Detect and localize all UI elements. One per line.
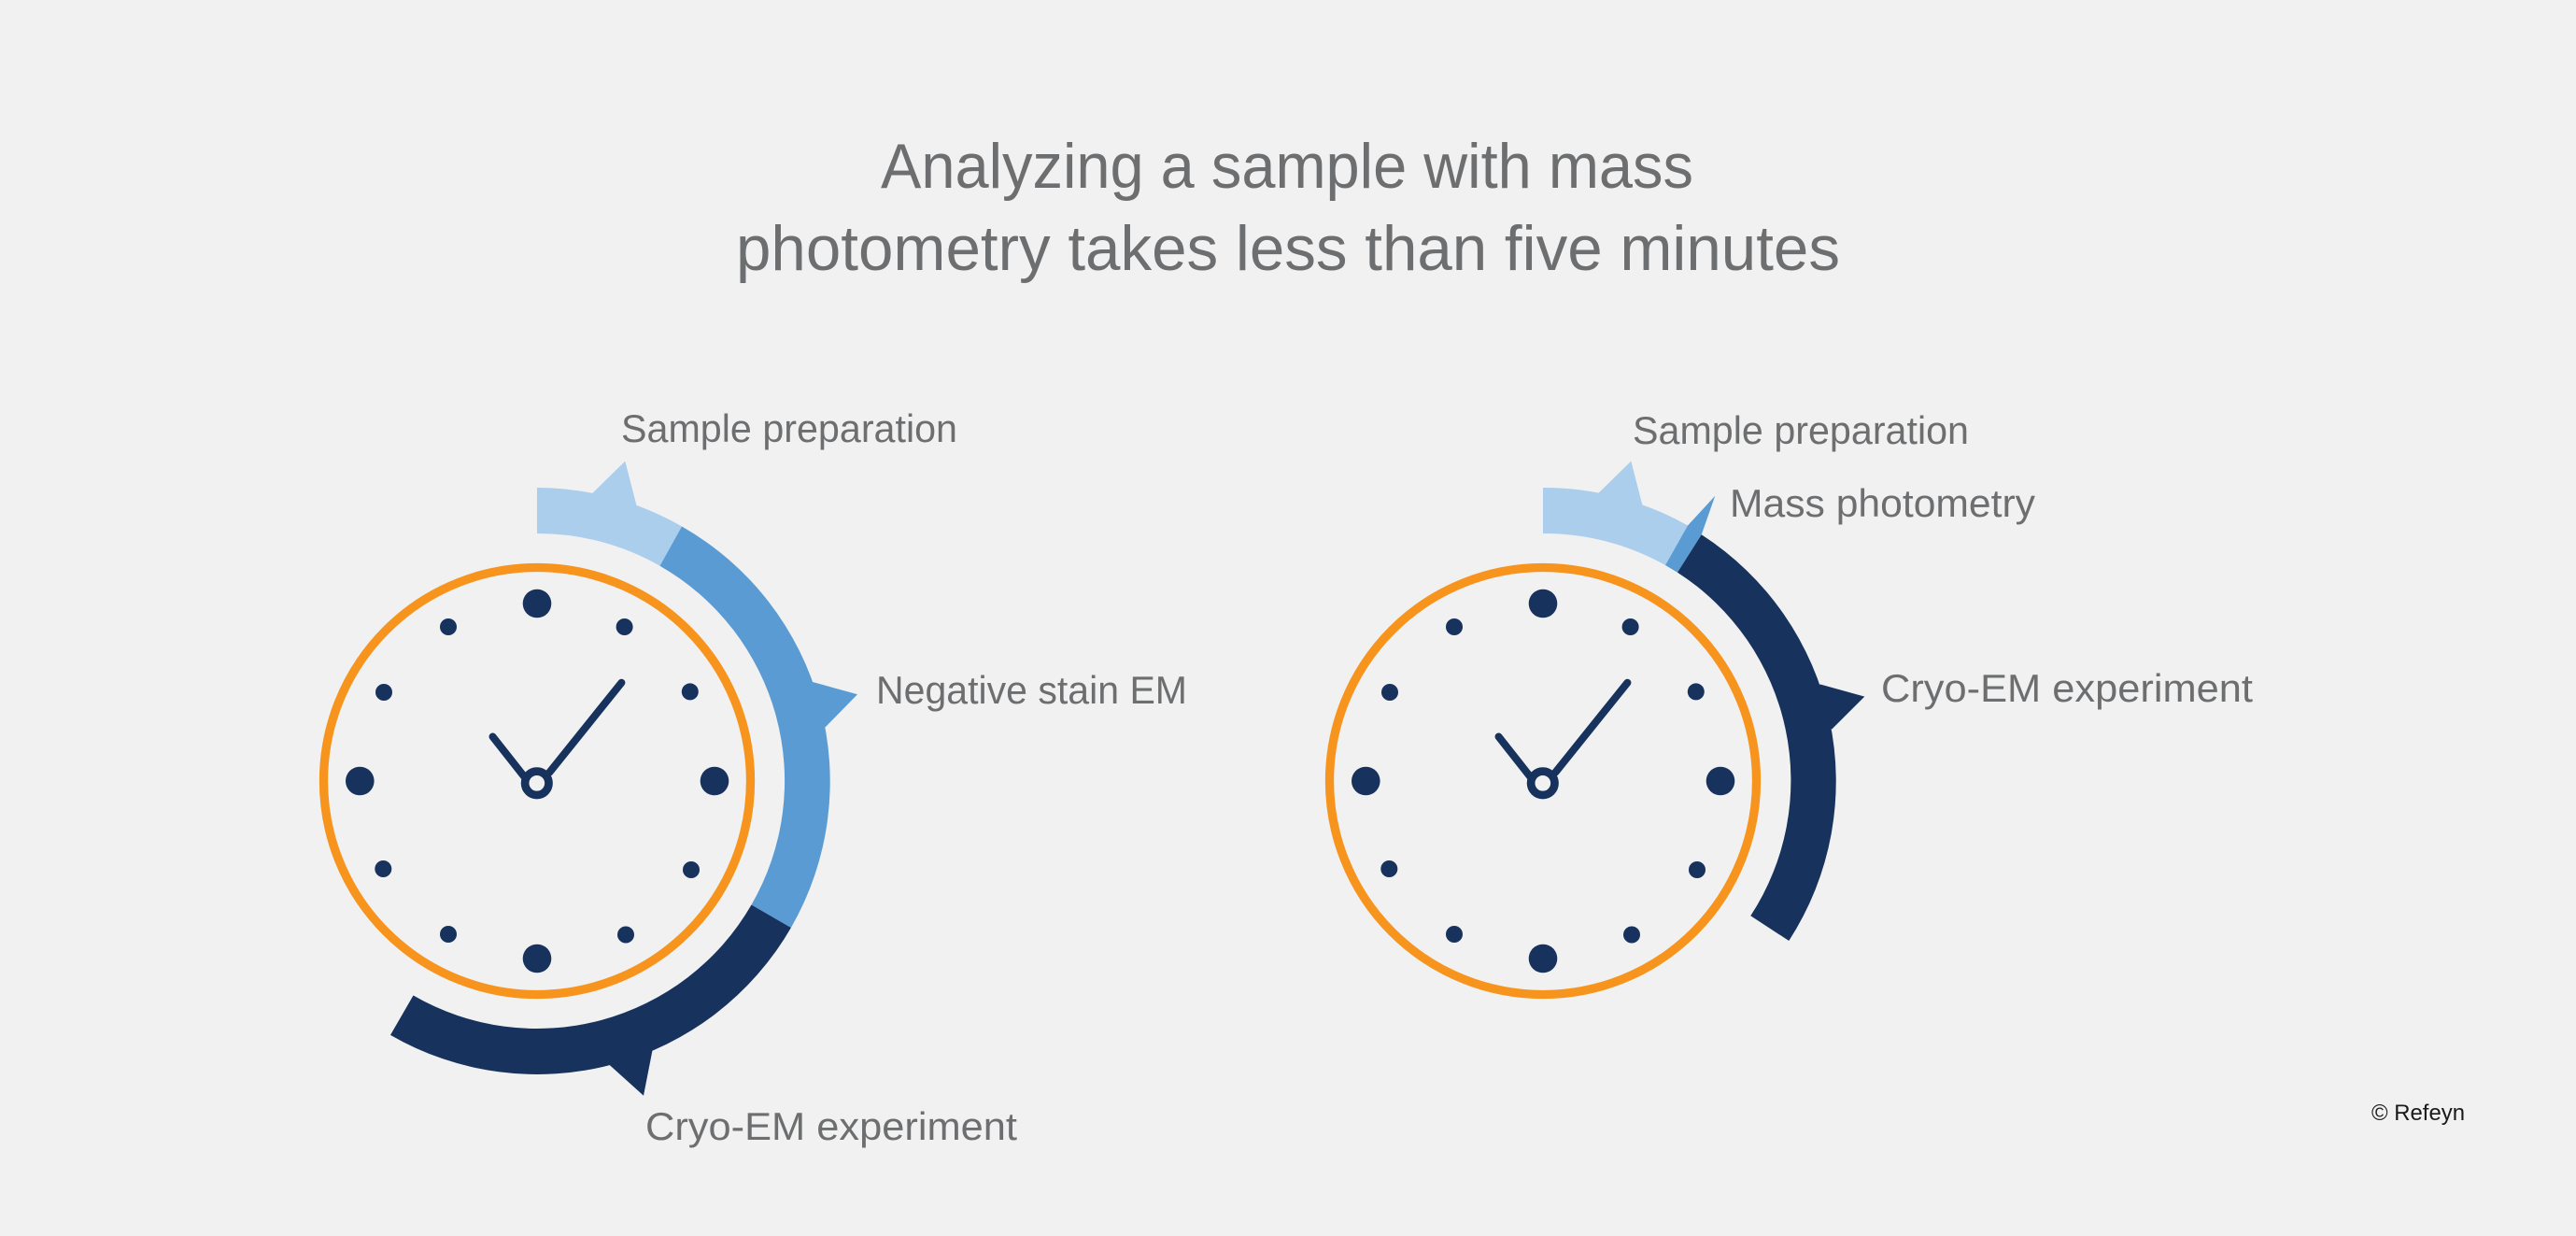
arc: mass photometry xyxy=(1665,496,1715,573)
arc: cryo-EM experiment xyxy=(390,904,791,1096)
arc: cryo-EM experiment xyxy=(1677,534,1864,941)
label: cryo-EM experiment: Cryo-EM experiment xyxy=(1881,666,2253,710)
title xyxy=(736,131,1840,284)
right clock: process timeline xyxy=(1330,408,2253,994)
label: cryo-EM experiment: Cryo-EM experiment xyxy=(645,1104,1017,1148)
title: photometry takes less than five minutes xyxy=(736,213,1840,284)
clock face xyxy=(1330,568,1756,994)
title: Analyzing a sample with mass xyxy=(881,131,1693,202)
arc: negative stain EM xyxy=(659,527,857,928)
label: sample preparation: Sample preparation xyxy=(621,406,957,450)
arc: sample preparation xyxy=(537,462,682,566)
copyright: © Refeyn xyxy=(2371,1101,2465,1126)
clock face xyxy=(323,568,751,994)
label: sample preparation: Sample preparation xyxy=(1633,408,1969,452)
left clock: process timeline xyxy=(323,406,1187,1148)
label: negative stain EM: Negative stain EM xyxy=(876,668,1187,712)
arc: sample preparation xyxy=(1543,462,1688,565)
label: mass photometry: Mass photometry xyxy=(1730,481,2035,525)
